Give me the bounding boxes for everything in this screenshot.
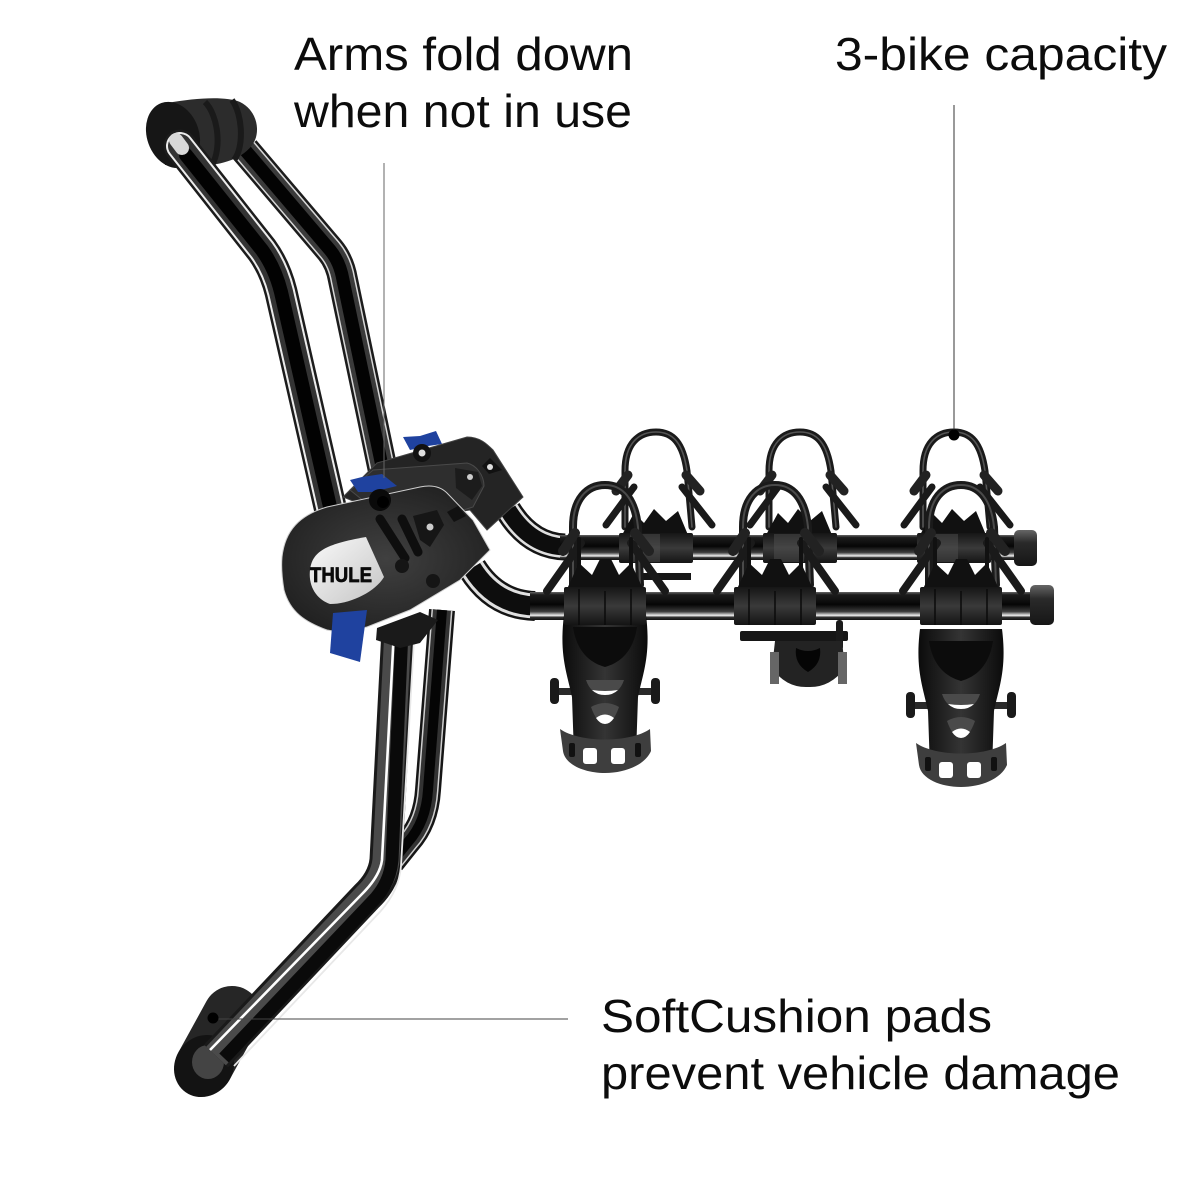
blue strap lower [330,610,367,662]
label: SoftCushion pads: prevent vehicle damage [601,1047,1120,1099]
front cradle left with strap [547,485,665,773]
leader: 3-bike capacity [948,105,960,440]
top cushion pad [137,94,257,176]
rear cradle 2 [750,432,856,563]
label: arms fold down: when not in use [293,85,632,137]
front housing with Thule logo [282,486,490,631]
front lower arm [210,630,414,1066]
bottom cushion pad [162,1015,246,1109]
rear crossbar [508,510,1037,566]
rear housing [343,437,523,530]
leader: arms fold down [383,163,385,478]
leader: SoftCushion pads [208,1012,568,1024]
rear lower arm [392,610,442,862]
blue strap top [403,431,442,450]
small rod behind left cradle [637,573,691,580]
center folded strap [740,620,848,687]
blue strap middle [350,474,397,492]
front cradle center [717,485,835,625]
middle housing [350,463,484,530]
front crossbar [472,568,1054,625]
label: SoftCushion pads: SoftCushion pads [601,990,992,1042]
label: 3-bike capacity: 3-bike capacity [835,28,1167,80]
rear cradle 3 [904,432,1010,563]
rear upper arm [245,150,387,490]
label: arms fold down: Arms fold down [294,28,633,80]
lever post [376,612,438,648]
rear cradle 1 [606,432,712,563]
front upper arm [176,140,333,520]
THULE logo: THULE [310,564,372,587]
front cradle right with strap [903,485,1021,787]
